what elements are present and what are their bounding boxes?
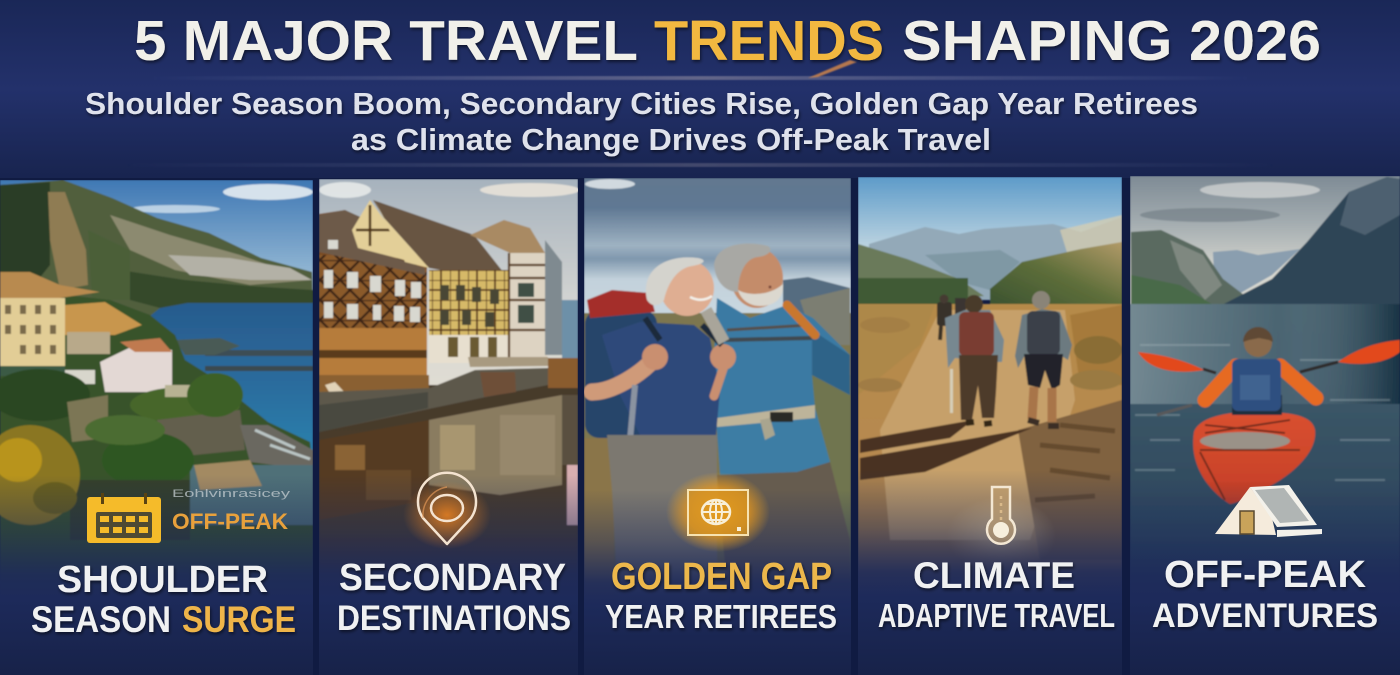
- subtitle: as Climate Change Drives Off-Peak Travel: [351, 122, 991, 157]
- label: secondary destinations: DESTINATIONS: [337, 599, 571, 638]
- buildings: [319, 199, 578, 432]
- label: golden gap year retirees: [605, 556, 837, 635]
- label: golden gap year retirees: YEAR RETIREES: [605, 598, 837, 635]
- title: 5 MAJOR TRAVEL: [134, 9, 638, 73]
- icon: map pin: [403, 473, 491, 549]
- photo: coastal village: [0, 180, 313, 568]
- label: golden gap year retirees: GOLDEN GAP: [611, 556, 832, 598]
- tag: off-peak: Eohlvinrasicey: [172, 488, 291, 500]
- panel: golden gap year retirees: [584, 178, 851, 675]
- header band: [0, 0, 1400, 178]
- panel fade: [1130, 480, 1400, 675]
- label: shoulder season surge: [31, 559, 296, 640]
- panel: secondary destinations: [319, 179, 580, 675]
- label: secondary destinations: SECONDARY: [339, 557, 566, 599]
- label: shoulder season surge: SEASON: [31, 599, 171, 640]
- title: [134, 9, 1321, 73]
- photo: senior couple with backpacks: [584, 178, 851, 586]
- panel: off-peak adventures: [1130, 176, 1400, 675]
- reflection: [319, 395, 578, 525]
- label: shoulder season surge: SURGE: [182, 599, 296, 640]
- photo: half-timbered riverside town: [319, 179, 578, 568]
- icon: passport: [666, 472, 770, 552]
- panel: shoulder season surge: [0, 180, 313, 675]
- panel fade: [584, 490, 851, 675]
- tag: off-peak: [172, 488, 291, 534]
- icon: thermometer: [987, 487, 1015, 544]
- icon: calendar: [87, 493, 161, 543]
- title: TRENDS: [654, 9, 884, 73]
- label: climate adaptive travel: CLIMATE: [913, 555, 1075, 596]
- photo: kayaker on a lake: [1130, 176, 1400, 566]
- photo: hikers on dirt trail: [858, 177, 1122, 578]
- woman: [584, 256, 738, 568]
- label: climate adaptive travel: ADAPTIVE TRAVEL: [878, 597, 1115, 634]
- title: SHAPING 2026: [902, 9, 1321, 73]
- label: secondary destinations: [337, 557, 571, 638]
- label: off-peak adventures: OFF-PEAK: [1164, 554, 1367, 596]
- panel fade: [0, 475, 313, 675]
- icon: tent: [1215, 485, 1322, 537]
- subtitle: Shoulder Season Boom, Secondary Cities Rise, Golden Gap Year Retirees: [85, 86, 1198, 121]
- panel fade: [319, 475, 578, 675]
- tag: off-peak: OFF-PEAK: [172, 509, 288, 534]
- man: [714, 243, 851, 562]
- hikers: [937, 291, 1072, 426]
- subtitle: [85, 86, 1198, 157]
- label: off-peak adventures: [1152, 554, 1378, 635]
- label: shoulder season surge: SHOULDER: [57, 559, 268, 601]
- label: climate adaptive travel: [878, 555, 1115, 634]
- label: off-peak adventures: ADVENTURES: [1152, 597, 1378, 635]
- buildings: [0, 272, 172, 392]
- panel fade: [858, 470, 1122, 675]
- kayak and paddler: [1138, 327, 1400, 504]
- panel: climate adaptive travel: [858, 177, 1122, 675]
